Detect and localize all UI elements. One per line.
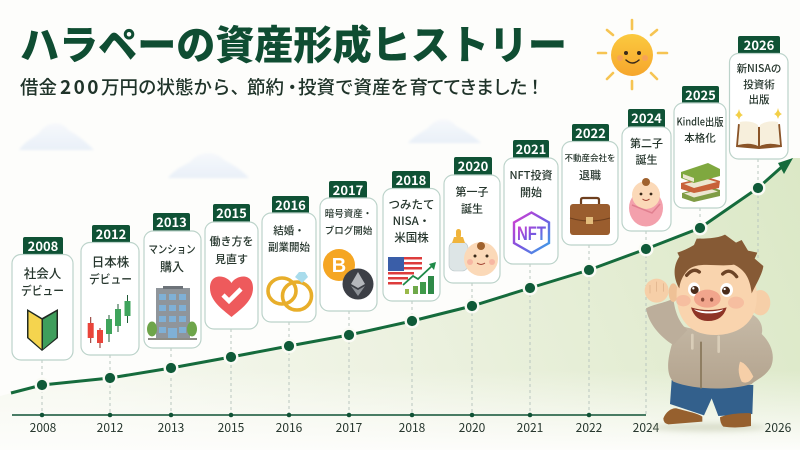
card: 2025: 本格化 bbox=[684, 130, 716, 146]
card: 2018: NISA・ bbox=[393, 213, 430, 229]
baseline axis bbox=[12, 413, 646, 417]
axis year labels: 2015 bbox=[218, 419, 245, 436]
card: 2012 bbox=[81, 224, 139, 355]
card: 2026 bbox=[730, 35, 788, 159]
axis year labels: 2024 bbox=[633, 419, 660, 436]
card: 2018: 米国株 bbox=[394, 230, 429, 246]
card: 2017: 2017 bbox=[333, 180, 364, 199]
card: 2018 bbox=[383, 170, 440, 301]
card: 2008: デビュー bbox=[21, 282, 64, 299]
subtitle: 投資で資産を bbox=[298, 74, 409, 100]
card: 2016: 結婚・ bbox=[273, 223, 305, 238]
card: 2015: 2015 bbox=[216, 203, 247, 222]
card: 2017: ブログ開始 bbox=[325, 223, 373, 237]
card: 2013: 2013 bbox=[156, 212, 187, 231]
card: 2008: 2008 bbox=[28, 236, 59, 255]
card: 2008: 社会人 bbox=[24, 263, 62, 282]
card: 2022: 2022 bbox=[575, 123, 606, 142]
card: 2021 bbox=[504, 139, 558, 264]
card: 2012: デビュー bbox=[89, 270, 132, 288]
area under growth curve bbox=[0, 158, 800, 450]
subtitle: ・ bbox=[283, 74, 302, 100]
card: 2021: 2021 bbox=[516, 139, 546, 158]
card: 2021: 開始 bbox=[520, 184, 542, 200]
cloud right bbox=[408, 119, 481, 143]
card: 2008 bbox=[12, 236, 73, 360]
card: 2020: 誕生 bbox=[461, 200, 483, 216]
card: 2016: 副業開始 bbox=[268, 240, 310, 254]
connector lines bbox=[42, 159, 758, 415]
icon: smiling sun bbox=[598, 20, 667, 89]
card: 2017: 暗号資産・ bbox=[325, 206, 372, 220]
card: 2025 bbox=[674, 85, 726, 208]
card: 2012: 2012 bbox=[96, 224, 126, 243]
card: 2026: 出版 bbox=[748, 92, 770, 107]
card: 2026: 2026 bbox=[744, 35, 775, 54]
card: 2018: つみたて bbox=[388, 196, 434, 212]
card: 2024 bbox=[622, 108, 671, 231]
axis year labels: 2018 bbox=[399, 419, 426, 436]
card: 2025: Kindle出版 bbox=[676, 114, 724, 130]
title: ハラペーの資産形成ヒストリー bbox=[20, 13, 567, 71]
card: 2015 bbox=[205, 203, 258, 329]
card: 2015: 見直す bbox=[215, 251, 248, 267]
subtitle: 200 bbox=[60, 73, 101, 100]
card: 2021: NFT投資 bbox=[509, 167, 553, 183]
card: 2020: 2020 bbox=[458, 156, 489, 175]
card: 2024: 2024 bbox=[631, 108, 662, 127]
card: 2013: 購入 bbox=[160, 258, 184, 275]
card: 2016: 2016 bbox=[275, 195, 306, 214]
card: 2018: 2018 bbox=[396, 170, 427, 189]
card: 2015: 働き方を bbox=[210, 233, 254, 249]
subtitle: 育ててきました！ bbox=[410, 74, 543, 100]
card: 2012: 日本株 bbox=[92, 252, 130, 270]
card: 2022 bbox=[562, 123, 618, 245]
card: 2020 bbox=[444, 156, 500, 283]
card: 2017 bbox=[320, 180, 377, 311]
axis year labels: 2008 bbox=[30, 419, 57, 436]
card: 2025: 2025 bbox=[685, 85, 716, 104]
card: 2013 bbox=[144, 212, 201, 348]
card: 2026: 投資術 bbox=[743, 77, 775, 92]
card: 2024: 誕生 bbox=[636, 152, 658, 168]
card: 2022: 不動産会社を bbox=[564, 152, 616, 164]
axis year labels: 2022 bbox=[576, 419, 603, 436]
axis year labels bbox=[30, 419, 792, 436]
card: 2026: 新NISAの bbox=[737, 61, 781, 76]
card: 2021: NFT bbox=[517, 224, 546, 245]
subtitle: 万円の状態から、 bbox=[101, 74, 249, 100]
subtitle: 借金 bbox=[20, 74, 57, 100]
axis year labels: 2020 bbox=[459, 419, 486, 436]
axis year labels: 2017 bbox=[336, 419, 363, 436]
card: 2013: マンション bbox=[148, 241, 196, 257]
cloud middle bbox=[168, 153, 249, 178]
growth line with arrow bbox=[11, 158, 793, 393]
axis year labels: 2012 bbox=[97, 419, 124, 436]
character: pig-nosed boy in hoodie bbox=[645, 235, 773, 431]
axis year labels: 2016 bbox=[276, 419, 303, 436]
axis year labels: 2026 bbox=[765, 419, 792, 436]
card: 2016 bbox=[262, 195, 316, 322]
card: 2024: 第二子 bbox=[630, 135, 663, 151]
axis year labels: 2013 bbox=[158, 419, 184, 436]
cloud left bbox=[19, 123, 94, 150]
subtitle: 節約 bbox=[247, 74, 284, 100]
card: 2020: 第一子 bbox=[456, 184, 488, 200]
card: 2022: 退職 bbox=[579, 167, 601, 183]
card: 2017: B bbox=[332, 255, 346, 277]
axis year labels: 2021 bbox=[517, 419, 543, 436]
